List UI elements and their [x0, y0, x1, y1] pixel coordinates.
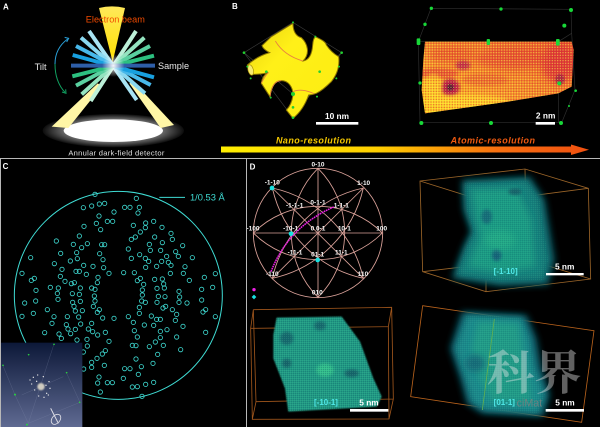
inset: 3D diffraction volume — [0, 343, 82, 427]
3D views: lower row — [250, 305, 595, 423]
label: sample: Sample — [158, 61, 189, 71]
panel letter C: C — [3, 162, 9, 171]
resolution label — [159, 193, 226, 203]
cyan zone axes — [270, 186, 320, 262]
legend markers — [252, 288, 256, 299]
zone axis labels: 0-1-1 — [310, 199, 326, 206]
zone axis labels: 010 — [312, 290, 323, 297]
zone axis labels: 100 — [376, 226, 387, 233]
zone axis labels: 1-1-1 — [334, 202, 349, 209]
panel dividers — [0, 158, 600, 427]
scale bar: 5 nm (right) — [546, 397, 584, 412]
resolution label: 1/0.53 Å — [190, 193, 226, 203]
atomic-resolution particle — [417, 7, 578, 125]
panel: D orientation map — [245, 160, 387, 299]
watermark: ciMat — [517, 398, 542, 410]
bounding box: [01-1] — [411, 306, 594, 422]
label: nano-resolution: Nano-resolution — [276, 136, 351, 146]
zone axis labels: -1-10 — [265, 180, 280, 187]
axis label: [-10-1]: [-10-1] — [314, 398, 338, 407]
diffracted beams — [52, 81, 174, 128]
panel letter A: A — [3, 3, 9, 12]
zone axis labels: -100 — [247, 226, 260, 233]
scale bar: 10 nm: 10 nm — [325, 111, 349, 121]
zone axis labels: -110 — [266, 271, 279, 278]
tilt arrows — [55, 37, 69, 93]
scale bar: 2 nm: 2 nm — [536, 111, 555, 121]
reconstruction volume — [452, 177, 555, 286]
label: tilt: Tilt — [35, 62, 47, 72]
resolution circle — [14, 191, 222, 399]
magenta tilt trajectory — [271, 207, 334, 272]
panel letter B: B — [232, 2, 238, 11]
resolution arrow — [221, 144, 589, 155]
panel letter D: D — [250, 163, 256, 172]
scale bar: 5 nm — [546, 262, 584, 275]
label: detector: Annular dark-field detector — [68, 149, 165, 158]
nano-resolution cube — [243, 21, 343, 119]
zone axis labels: 110 — [358, 271, 369, 278]
bounding box: [-10-1] — [251, 307, 393, 419]
annular dark-field detector — [43, 114, 184, 147]
panel: B reconstruction resolutions — [232, 3, 577, 144]
reconstruction volume: [01-1] — [450, 312, 550, 417]
zone axis labels: 0 0-1 — [311, 226, 326, 233]
zone axis labels: 01-1 — [311, 251, 325, 258]
zone axis labels: 10-1 — [338, 226, 351, 233]
scale bar: 5 nm (left): 5 nm — [359, 397, 379, 407]
zone axis labels — [247, 161, 387, 297]
zone axis labels: 1-10 — [357, 180, 371, 187]
electron beam cone — [99, 6, 125, 62]
zone axis labels: 11-1 — [335, 250, 348, 257]
3D view: [-1-10] — [418, 168, 592, 292]
scale bar: 5 nm: 5 nm — [555, 262, 574, 272]
axis label: [01-1]: [01-1] — [494, 398, 515, 407]
tilted sample series — [71, 31, 155, 101]
axis label: [-1-10] — [494, 267, 518, 276]
beam intersection glow — [102, 54, 125, 77]
label: atomic-resolution: Atomic-resolution — [450, 136, 535, 146]
scale bar: 5 nm (left) — [350, 397, 388, 412]
zone axis labels: -1-1-1 — [286, 202, 304, 209]
watermark: 科界 — [487, 335, 582, 403]
zone axis labels: -10-1 — [283, 226, 299, 233]
panel: C diffraction pattern — [0, 160, 245, 427]
panel: A electron beam geometry — [0, 0, 230, 158]
diffraction spots — [20, 192, 217, 398]
scale bar: 5 nm (right): 5 nm — [555, 397, 575, 407]
zone axis labels: 0-10 — [312, 161, 325, 168]
zone axis labels: -11-1 — [288, 250, 303, 257]
bounding box — [420, 169, 591, 292]
reconstruction volume: [-10-1] — [273, 317, 382, 412]
scale bar: 10 nm — [316, 111, 358, 125]
stereographic projection — [253, 168, 383, 298]
label: electron beam: Electron beam — [86, 14, 145, 24]
